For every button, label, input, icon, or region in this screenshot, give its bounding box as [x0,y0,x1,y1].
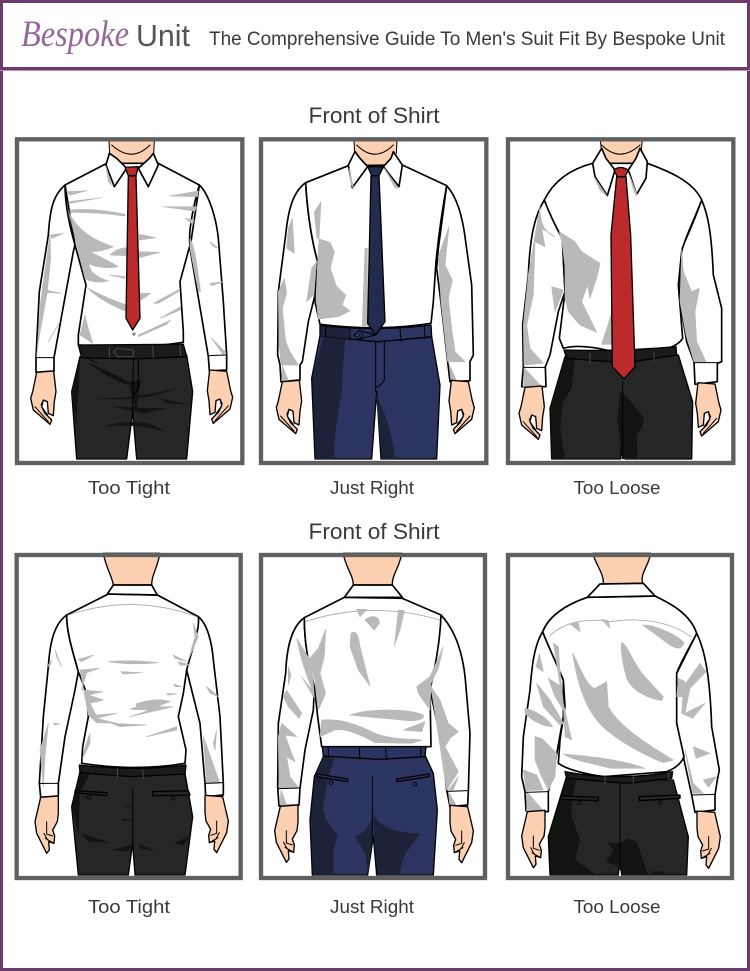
neck [600,138,643,170]
belt [78,344,187,359]
necktie [125,167,140,330]
pants [550,355,693,459]
hand right [697,811,720,868]
hand left [31,371,56,424]
label: too tight back: Too Tight [88,896,170,917]
hand left [519,386,544,439]
belt [322,747,426,759]
hand right [205,795,228,853]
hand left [522,810,545,868]
panel: front too loose [508,138,733,463]
heading: back row: Front of Shirt [308,519,440,544]
label: just right: Just Right [330,477,414,498]
neck [103,553,160,585]
necktie [611,167,635,379]
label: just right back: Just Right [330,896,414,917]
pants [310,757,437,875]
label: too loose: Too Loose [574,477,660,498]
belt [79,765,186,778]
frame [17,139,242,463]
hand right [207,370,233,423]
shirt [522,583,719,812]
title: The Comprehensive Guide To Men's Suit Fit By Bespoke Unit [209,29,726,50]
frame [508,555,732,878]
belt [564,347,677,362]
frame [261,555,485,878]
pants [312,336,440,459]
hand left [35,796,58,853]
shirt [278,585,470,807]
shirt [36,153,227,372]
panel: back too tight [17,553,241,878]
panel: back too loose [508,553,732,878]
shirt [39,585,223,797]
pants [72,355,193,459]
label: too tight: Too Tight [88,477,170,498]
hand right [449,380,474,434]
frame [17,555,241,878]
necktie [368,167,385,335]
panel: back just right [261,553,485,878]
frame [508,139,733,463]
shirt [278,152,473,382]
neck [343,553,402,585]
hand right [450,805,473,863]
hand left [276,380,302,434]
heading: front row: Front of Shirt [308,103,440,128]
icon: button [132,332,136,336]
belt [565,772,673,783]
neck [353,138,398,168]
logo: Unit [136,18,190,53]
logo: Bespoke [21,14,129,55]
neck [593,553,651,584]
hand left [275,805,298,862]
belt [320,325,432,342]
header bar [0,14,750,71]
pants [548,778,688,875]
pants [72,772,193,875]
panel: front just right [261,138,486,463]
label: too loose back: Too Loose [574,896,660,917]
neck [108,138,155,168]
panel: front too tight [17,138,242,463]
frame [261,139,486,463]
hand right [696,383,721,436]
shirt [522,148,722,387]
